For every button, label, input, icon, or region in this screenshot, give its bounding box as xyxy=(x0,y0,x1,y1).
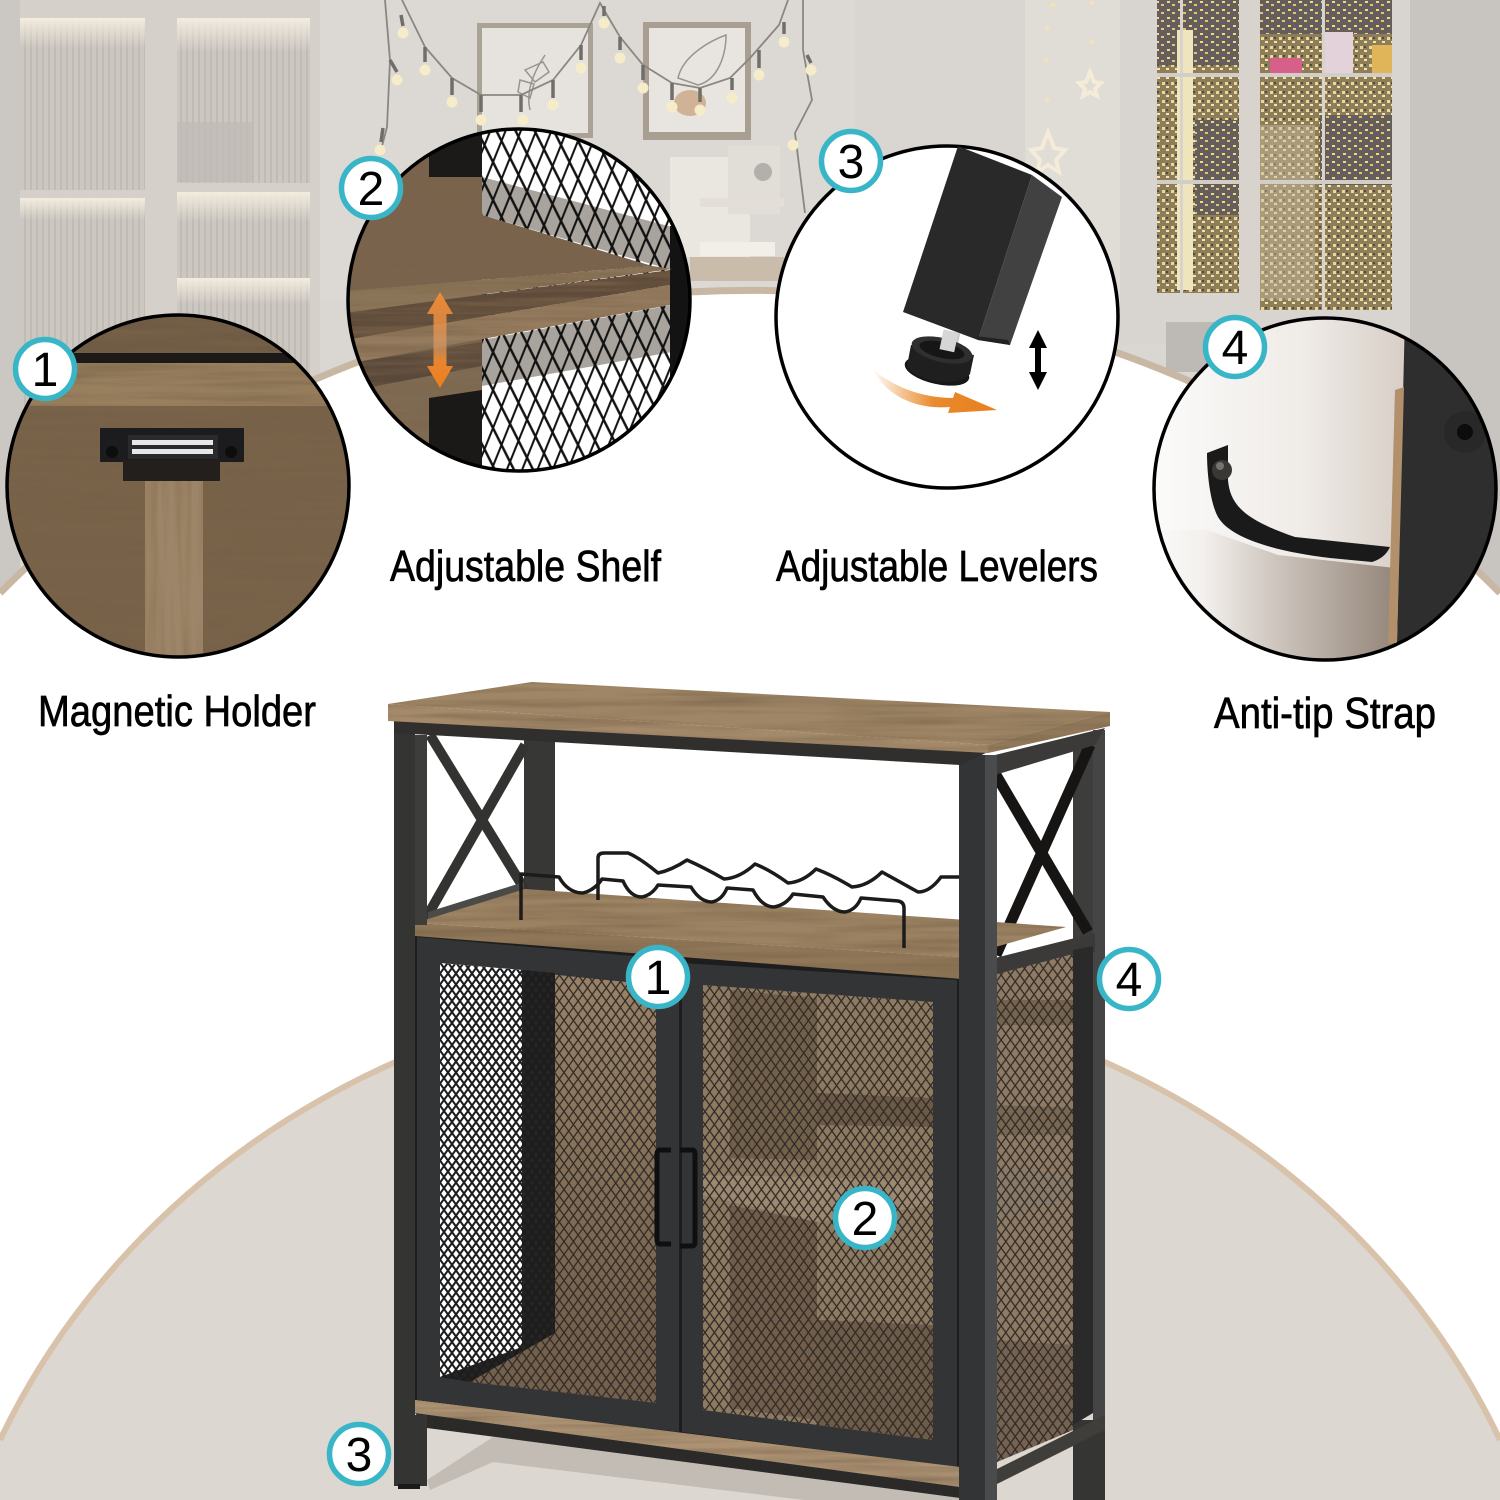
right rear leg xyxy=(1073,730,1105,1500)
left door xyxy=(417,937,679,1432)
badge 4 on cabinet: 4 xyxy=(1116,954,1142,1007)
shelf dark band xyxy=(345,270,670,340)
framed art xyxy=(477,22,751,140)
icon: orange rotate arrow xyxy=(872,368,997,413)
mesh back panels xyxy=(482,130,672,470)
callout 2: adjustable shelf xyxy=(345,125,695,480)
lower wood side xyxy=(362,342,482,386)
left X brace xyxy=(425,735,528,920)
label: Magnetic Holder: Magnetic Holder xyxy=(38,687,316,736)
fluted glass doors xyxy=(20,0,320,420)
callout 3: adjustable levelers xyxy=(776,146,1118,488)
wine rack xyxy=(521,853,959,948)
bottom wood strip xyxy=(415,1400,960,1487)
front right leg xyxy=(959,755,997,1500)
side rails xyxy=(995,728,1105,775)
badge 3 on cabinet: 3 xyxy=(346,1429,372,1482)
icon: black double arrow xyxy=(1029,330,1047,390)
callout 1: magnetic holder xyxy=(0,315,360,668)
side mesh panel xyxy=(997,946,1093,1462)
badge 1 top xyxy=(16,340,74,398)
night city window xyxy=(1120,0,1415,372)
badge 3 top: 3 xyxy=(838,136,864,189)
badge 1 on cabinet xyxy=(628,948,688,1006)
icon: orange double arrow xyxy=(427,292,453,388)
wood stem xyxy=(145,478,203,668)
room background photo xyxy=(0,0,1500,620)
bottom rail xyxy=(415,1413,960,1498)
shelf front edge xyxy=(345,285,670,364)
door handles xyxy=(657,1150,695,1246)
string lights xyxy=(374,0,816,213)
leg xyxy=(903,146,1032,340)
label: Adjustable Levelers: Adjustable Levelers xyxy=(776,542,1098,591)
right wall xyxy=(1410,0,1500,620)
badge 3 on cabinet xyxy=(330,1424,388,1484)
tan edge of arc xyxy=(0,290,1500,593)
label: Anti-tip Strap: Anti-tip Strap xyxy=(1214,689,1436,738)
badge 2 on cabinet: 2 xyxy=(852,1193,878,1246)
right door xyxy=(682,963,957,1467)
badge 2 on cabinet xyxy=(836,1188,894,1248)
magnet catch xyxy=(100,428,244,481)
badge 3 top xyxy=(822,132,880,190)
top rail xyxy=(394,720,988,765)
badge 1 on cabinet: 1 xyxy=(645,952,671,1005)
badge 4 top xyxy=(1206,318,1264,376)
shelf lighter edge xyxy=(345,266,672,313)
door backing xyxy=(415,936,962,1470)
badge 2 top: 2 xyxy=(358,163,384,216)
table top xyxy=(388,682,1110,753)
front left leg xyxy=(394,722,427,1489)
shelf top surface xyxy=(429,177,652,280)
callout 4: anti-tip strap xyxy=(1150,315,1500,665)
back left leg xyxy=(524,738,555,903)
badge 2 top xyxy=(342,158,400,218)
badge 4 on cabinet xyxy=(1100,950,1158,1008)
leveler bolt and foot xyxy=(904,330,974,386)
middle shelf xyxy=(415,889,1066,979)
star lights xyxy=(1031,0,1101,172)
coffee machine xyxy=(670,146,800,281)
beige floor arc xyxy=(0,987,1500,1500)
badge 1 top: 1 xyxy=(32,344,58,397)
strap xyxy=(1207,445,1390,562)
wall xyxy=(320,0,1150,300)
badge 4 top: 4 xyxy=(1222,322,1248,375)
cabinet xyxy=(388,682,1110,1500)
right X brace xyxy=(996,745,1090,955)
label: Adjustable Shelf: Adjustable Shelf xyxy=(390,542,662,591)
